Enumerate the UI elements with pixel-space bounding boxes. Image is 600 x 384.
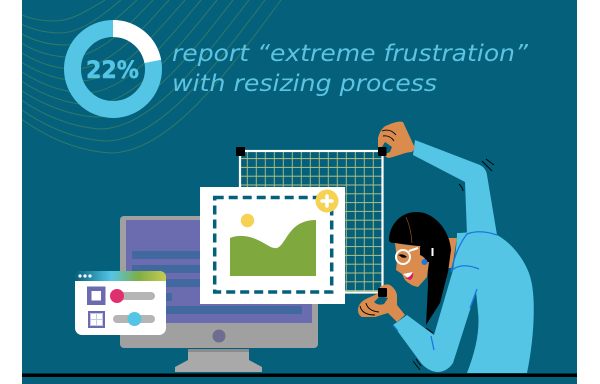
icon: single frame with slider <box>87 286 155 305</box>
icon: sun <box>241 214 254 227</box>
raised sleeve <box>413 140 497 235</box>
ear hair <box>420 244 430 262</box>
computer monitor <box>120 216 318 372</box>
icon: green landscape <box>230 220 316 276</box>
face <box>395 243 429 287</box>
earring <box>422 259 428 265</box>
torso and lower arm <box>393 232 534 373</box>
settings window panel <box>75 271 166 335</box>
neck <box>444 238 457 268</box>
heading text <box>172 39 529 97</box>
donut chart: 22% <box>72 28 154 110</box>
motion marks <box>413 159 494 370</box>
upper hand <box>378 122 415 158</box>
donut value: 22% <box>86 56 139 84</box>
icon: plus badge <box>316 190 338 212</box>
resize grid frame <box>236 147 382 292</box>
mouth <box>403 272 413 278</box>
glasses <box>396 248 432 264</box>
person resizing frame <box>358 122 534 373</box>
lower hand <box>358 284 405 322</box>
floor line <box>22 374 577 377</box>
sleeve outlines <box>393 232 497 350</box>
hair <box>389 212 451 325</box>
heading text: with resizing process <box>172 69 437 97</box>
heading text: report “extreme frustration” <box>172 39 529 67</box>
hair strand <box>406 217 412 243</box>
eye <box>398 254 407 258</box>
icon: grid frame with slider <box>88 311 155 328</box>
image card with dashed selection <box>200 187 345 304</box>
